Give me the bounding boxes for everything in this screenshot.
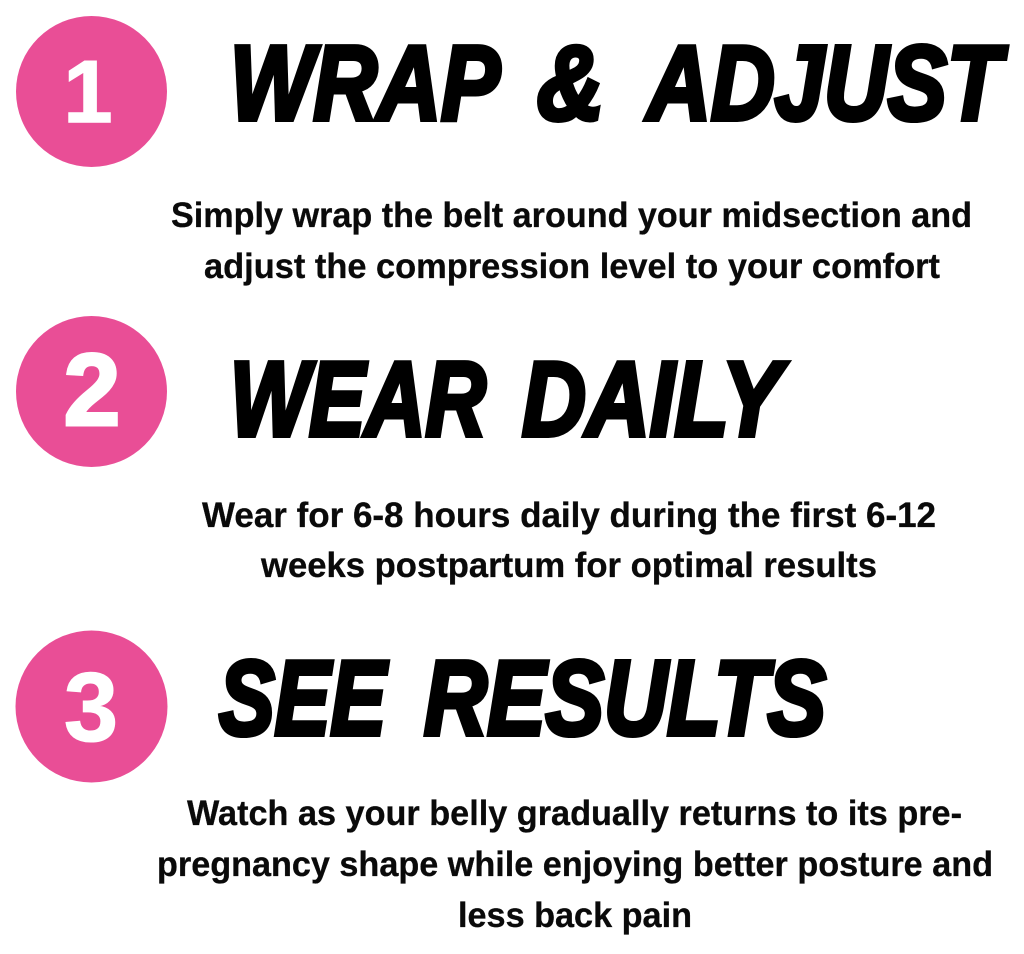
number badge 1: 1 [64, 42, 112, 141]
description 3: Watch as your belly gradually returns to its pre- [187, 794, 962, 833]
heading: see results [219, 640, 826, 758]
description 2 [202, 496, 936, 585]
step 1 [16, 16, 1008, 286]
description 1 [171, 196, 972, 286]
description 1: adjust the compression level to your comfort [204, 247, 940, 286]
number badge 1 [16, 16, 167, 167]
step 3 [16, 630, 993, 935]
heading: wrap and adjust: WRAP [230, 24, 500, 142]
number badge 2: 2 [64, 333, 120, 447]
heading: wrap and adjust [230, 24, 1008, 142]
description 3: pregnancy shape while enjoying better posture and [157, 845, 993, 884]
description 1: Simply wrap the belt around your midsection and [171, 196, 972, 235]
number badge 3: 3 [64, 652, 118, 762]
description 3: less back pain [458, 896, 692, 935]
heading: wear daily: DAILY [522, 340, 788, 458]
heading: wear daily [230, 340, 788, 458]
heading: see results: RESULTS [424, 640, 826, 758]
heading: wrap and adjust: & [537, 24, 604, 142]
step 2 [16, 316, 936, 585]
number badge 3 [16, 630, 168, 782]
heading: wear daily: WEAR [230, 340, 486, 458]
heading: see results: SEE [219, 640, 389, 758]
description 2: Wear for 6-8 hours daily during the first 6-12 [202, 496, 936, 535]
number badge 2 [16, 316, 167, 467]
description 2: weeks postpartum for optimal results [260, 546, 877, 585]
description 3 [157, 794, 993, 935]
